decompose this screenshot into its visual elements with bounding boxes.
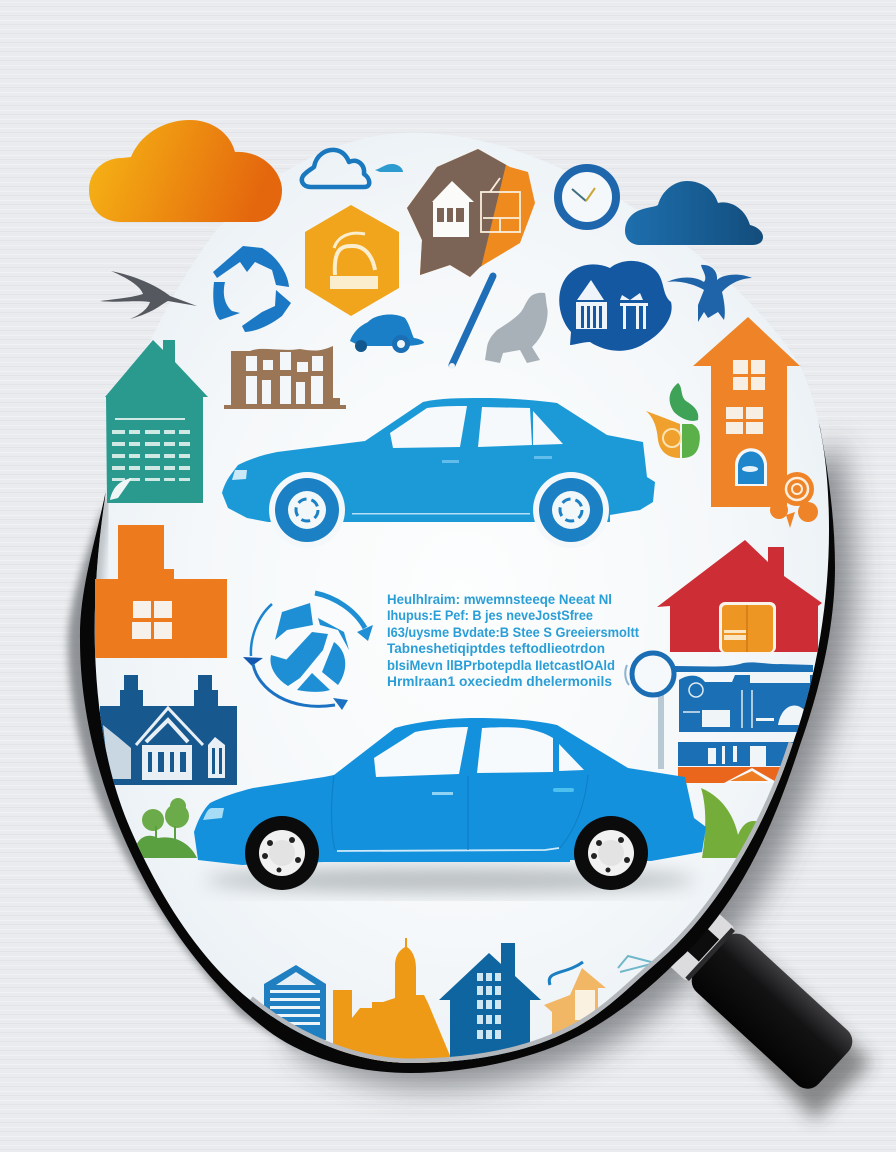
icon: blue pen [449,276,493,369]
windows [374,727,468,777]
handle grip [685,927,859,1095]
white cottage [432,181,474,237]
top blue car [222,398,655,548]
magnifier rim [80,365,835,1073]
icon: lower magnifier [625,653,674,769]
icon: teapot plant [646,383,700,458]
wheel: rear [533,472,609,548]
lens inner shade on the left [95,498,105,650]
icon: navy house row [100,675,237,785]
rear wheel [574,816,648,890]
icon: orange factory [95,525,227,658]
icon: orange tall house [693,317,800,507]
icon: striped blue tower [264,965,326,1040]
body text block [387,592,639,689]
icon: clock [558,168,616,226]
bottom skyline [264,938,655,1070]
body text block: Heulhlraim: mwemnsteeqe Neeat Nl [387,592,612,607]
headlight [203,808,224,820]
icon: pale blue kite [618,956,655,972]
icon: blue recycle arrows [213,246,291,332]
icon: globe with cycle arrows [243,593,373,710]
icon: dark bird [100,271,197,319]
left grey rim edge [68,505,300,1050]
icon: green trees [133,798,197,858]
body text block: I63/uysme Bvdate:B Stee S Greeiersmoltt [387,625,639,640]
car ground shadow [205,867,695,893]
drop shadow of magnifier [287,441,872,1120]
door seams [332,775,588,850]
icon: blue tall house [439,943,541,1070]
icon: outline cloud [302,150,403,187]
orange building outline [481,178,520,232]
magnifying glass handle [666,910,859,1095]
icon: brown ruins [224,346,346,409]
arched blue window [735,448,767,486]
windows [390,406,467,448]
icon: blue speech cloud with houses [559,261,672,351]
icon: orange flower [770,472,818,528]
chrome collar [667,911,736,982]
body text block: Tabneshetiqiptdes teftodlieotrdon [387,641,605,656]
body text block: Ihupus:E Pef: B jes neveJostSfree [387,608,593,623]
body text block: bIsiMevn llBPrbotepdla IIetcastlOAld [387,658,615,673]
lens inner silver edge [250,743,793,1063]
icon: brown and orange house badge [407,149,535,277]
small blue fish [375,164,403,172]
icon: orange skyline [333,938,451,1070]
icon: small blue car [350,315,424,353]
icon: orange cloud [89,120,282,222]
magnifier lens [95,133,829,1063]
front wheel [245,816,319,890]
wheel: front [269,472,345,548]
icon: grey seal [485,293,548,363]
icon: teal house [105,340,208,503]
body text block: Hrmlraan1 oxeciedm dhelermonils [387,674,612,689]
icon: blue winged creature [667,265,752,322]
icon: dark blue cloud [625,181,763,245]
icon: amber hexagon [305,205,399,316]
icon: blue machinery panels [675,662,815,783]
icon: pagoda [544,962,606,1040]
icon: red house [657,540,822,653]
bottom blue car [194,718,706,890]
icon: green leaves [701,788,763,858]
